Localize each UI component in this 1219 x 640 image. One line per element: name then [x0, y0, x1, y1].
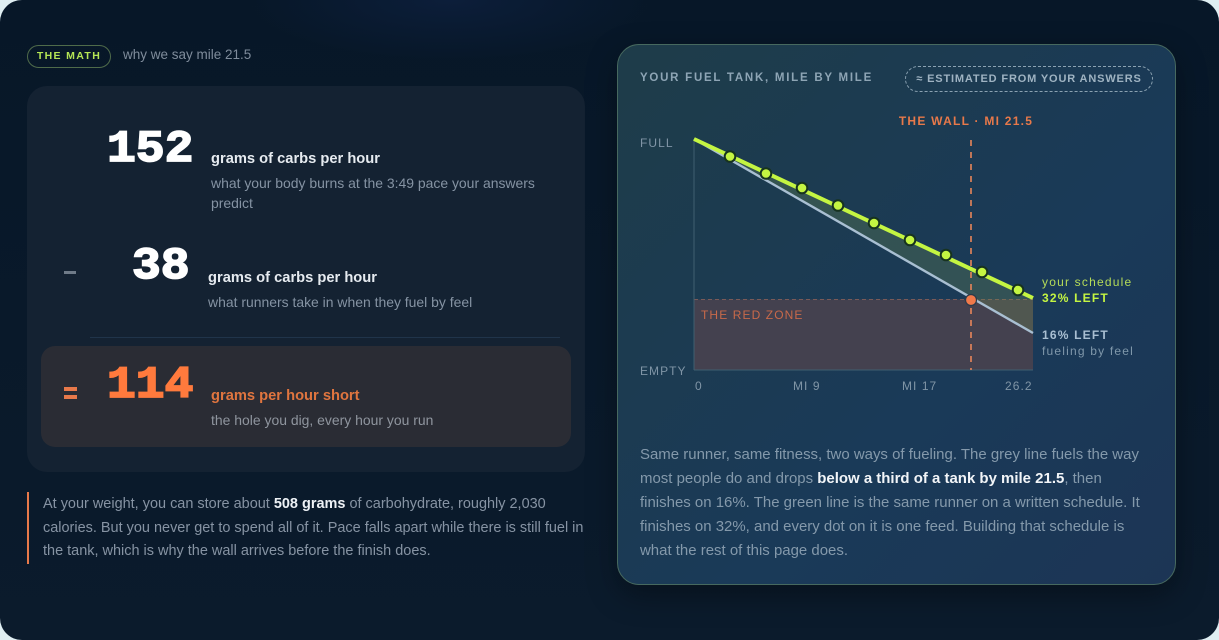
badge: the math: THE MATH	[37, 50, 101, 62]
row: 152 burned	[107, 125, 535, 211]
number 152: 152	[107, 125, 193, 175]
end labels: fueling by feel	[1042, 344, 1134, 358]
chart heading: YOUR FUEL TANK, MILE BY MILE	[640, 72, 873, 84]
grey line: fueling by feel	[694, 139, 1033, 333]
axis labels: EMPTY	[640, 364, 687, 378]
callout: storage note	[27, 492, 583, 564]
label: grams per hour: grams of carbs per hour	[211, 151, 380, 167]
axis labels: 26.2	[1005, 379, 1033, 393]
chart: fuel tank lines	[640, 114, 1134, 393]
description: what runners take in when they fuel by feel	[208, 294, 472, 310]
axes	[694, 139, 1033, 370]
gap between lines	[694, 139, 1033, 333]
description: the hole you dig, every hour you run	[211, 412, 433, 428]
callout text: calories. But you never get to spend all of it. Pace falls apart while there is still fuel in	[43, 520, 583, 536]
feed dots	[725, 151, 1023, 295]
chart explanation text: what the rest of this page does.	[640, 542, 848, 559]
chart explanation text: Same runner, same fitness, two ways of fueling. The grey line fuels the way	[640, 446, 1139, 463]
number 114: 114	[107, 361, 193, 411]
accent bar	[27, 492, 29, 564]
red zone	[694, 300, 1033, 370]
description: what your body burns at the 3:49 pace your answers predict	[211, 175, 535, 211]
axis labels: 0	[695, 379, 703, 393]
end labels	[1042, 275, 1134, 358]
end labels: 16% LEFT	[1042, 328, 1109, 342]
callout text	[43, 496, 583, 559]
badge: the math	[27, 45, 111, 68]
row: 114 result	[41, 346, 571, 447]
red zone: THE RED ZONE	[701, 308, 804, 322]
axis labels: FULL	[640, 136, 674, 150]
label: grams per hour: grams of carbs per hour	[208, 270, 377, 286]
chart explanation text	[640, 446, 1140, 559]
chart explanation text: finishes on 16%. The green line is the same runner on a written schedule. It	[640, 494, 1140, 511]
equals sign	[64, 387, 77, 399]
end labels: your schedule	[1042, 275, 1132, 289]
callout text: At your weight, you can store about 508 grams of carbohydrate, roughly 2,030	[43, 496, 546, 512]
end labels: 32% LEFT	[1042, 291, 1109, 305]
number 38: 38	[132, 242, 190, 292]
axis labels	[640, 136, 1033, 393]
wall label: THE WALL · MI 21.5	[899, 114, 1033, 128]
panel: the math equation	[27, 86, 585, 472]
minus sign	[64, 271, 76, 274]
chart explanation text: finishes on 32%, and every dot on it is one feed. Building that schedule is	[640, 518, 1124, 535]
badge: estimated	[905, 66, 1153, 92]
chart explanation text: most people do and drops below a third of a tank by mile 21.5, then	[640, 470, 1102, 487]
row: 38 taken in	[64, 242, 472, 310]
wall marker line	[970, 140, 972, 370]
wall dot	[966, 294, 976, 306]
green line: your schedule	[694, 139, 1033, 298]
badge: estimated: ≈ ESTIMATED FROM YOUR ANSWERS	[916, 73, 1142, 85]
subheading: why we say mile 21.5	[123, 47, 251, 62]
axis labels: MI 17	[902, 379, 937, 393]
callout text: the tank, which is why the wall arrives before the finish does.	[43, 543, 431, 559]
panel: fuel tank	[617, 44, 1176, 585]
axis labels: MI 9	[793, 379, 821, 393]
label: grams short: grams per hour short	[211, 388, 360, 404]
